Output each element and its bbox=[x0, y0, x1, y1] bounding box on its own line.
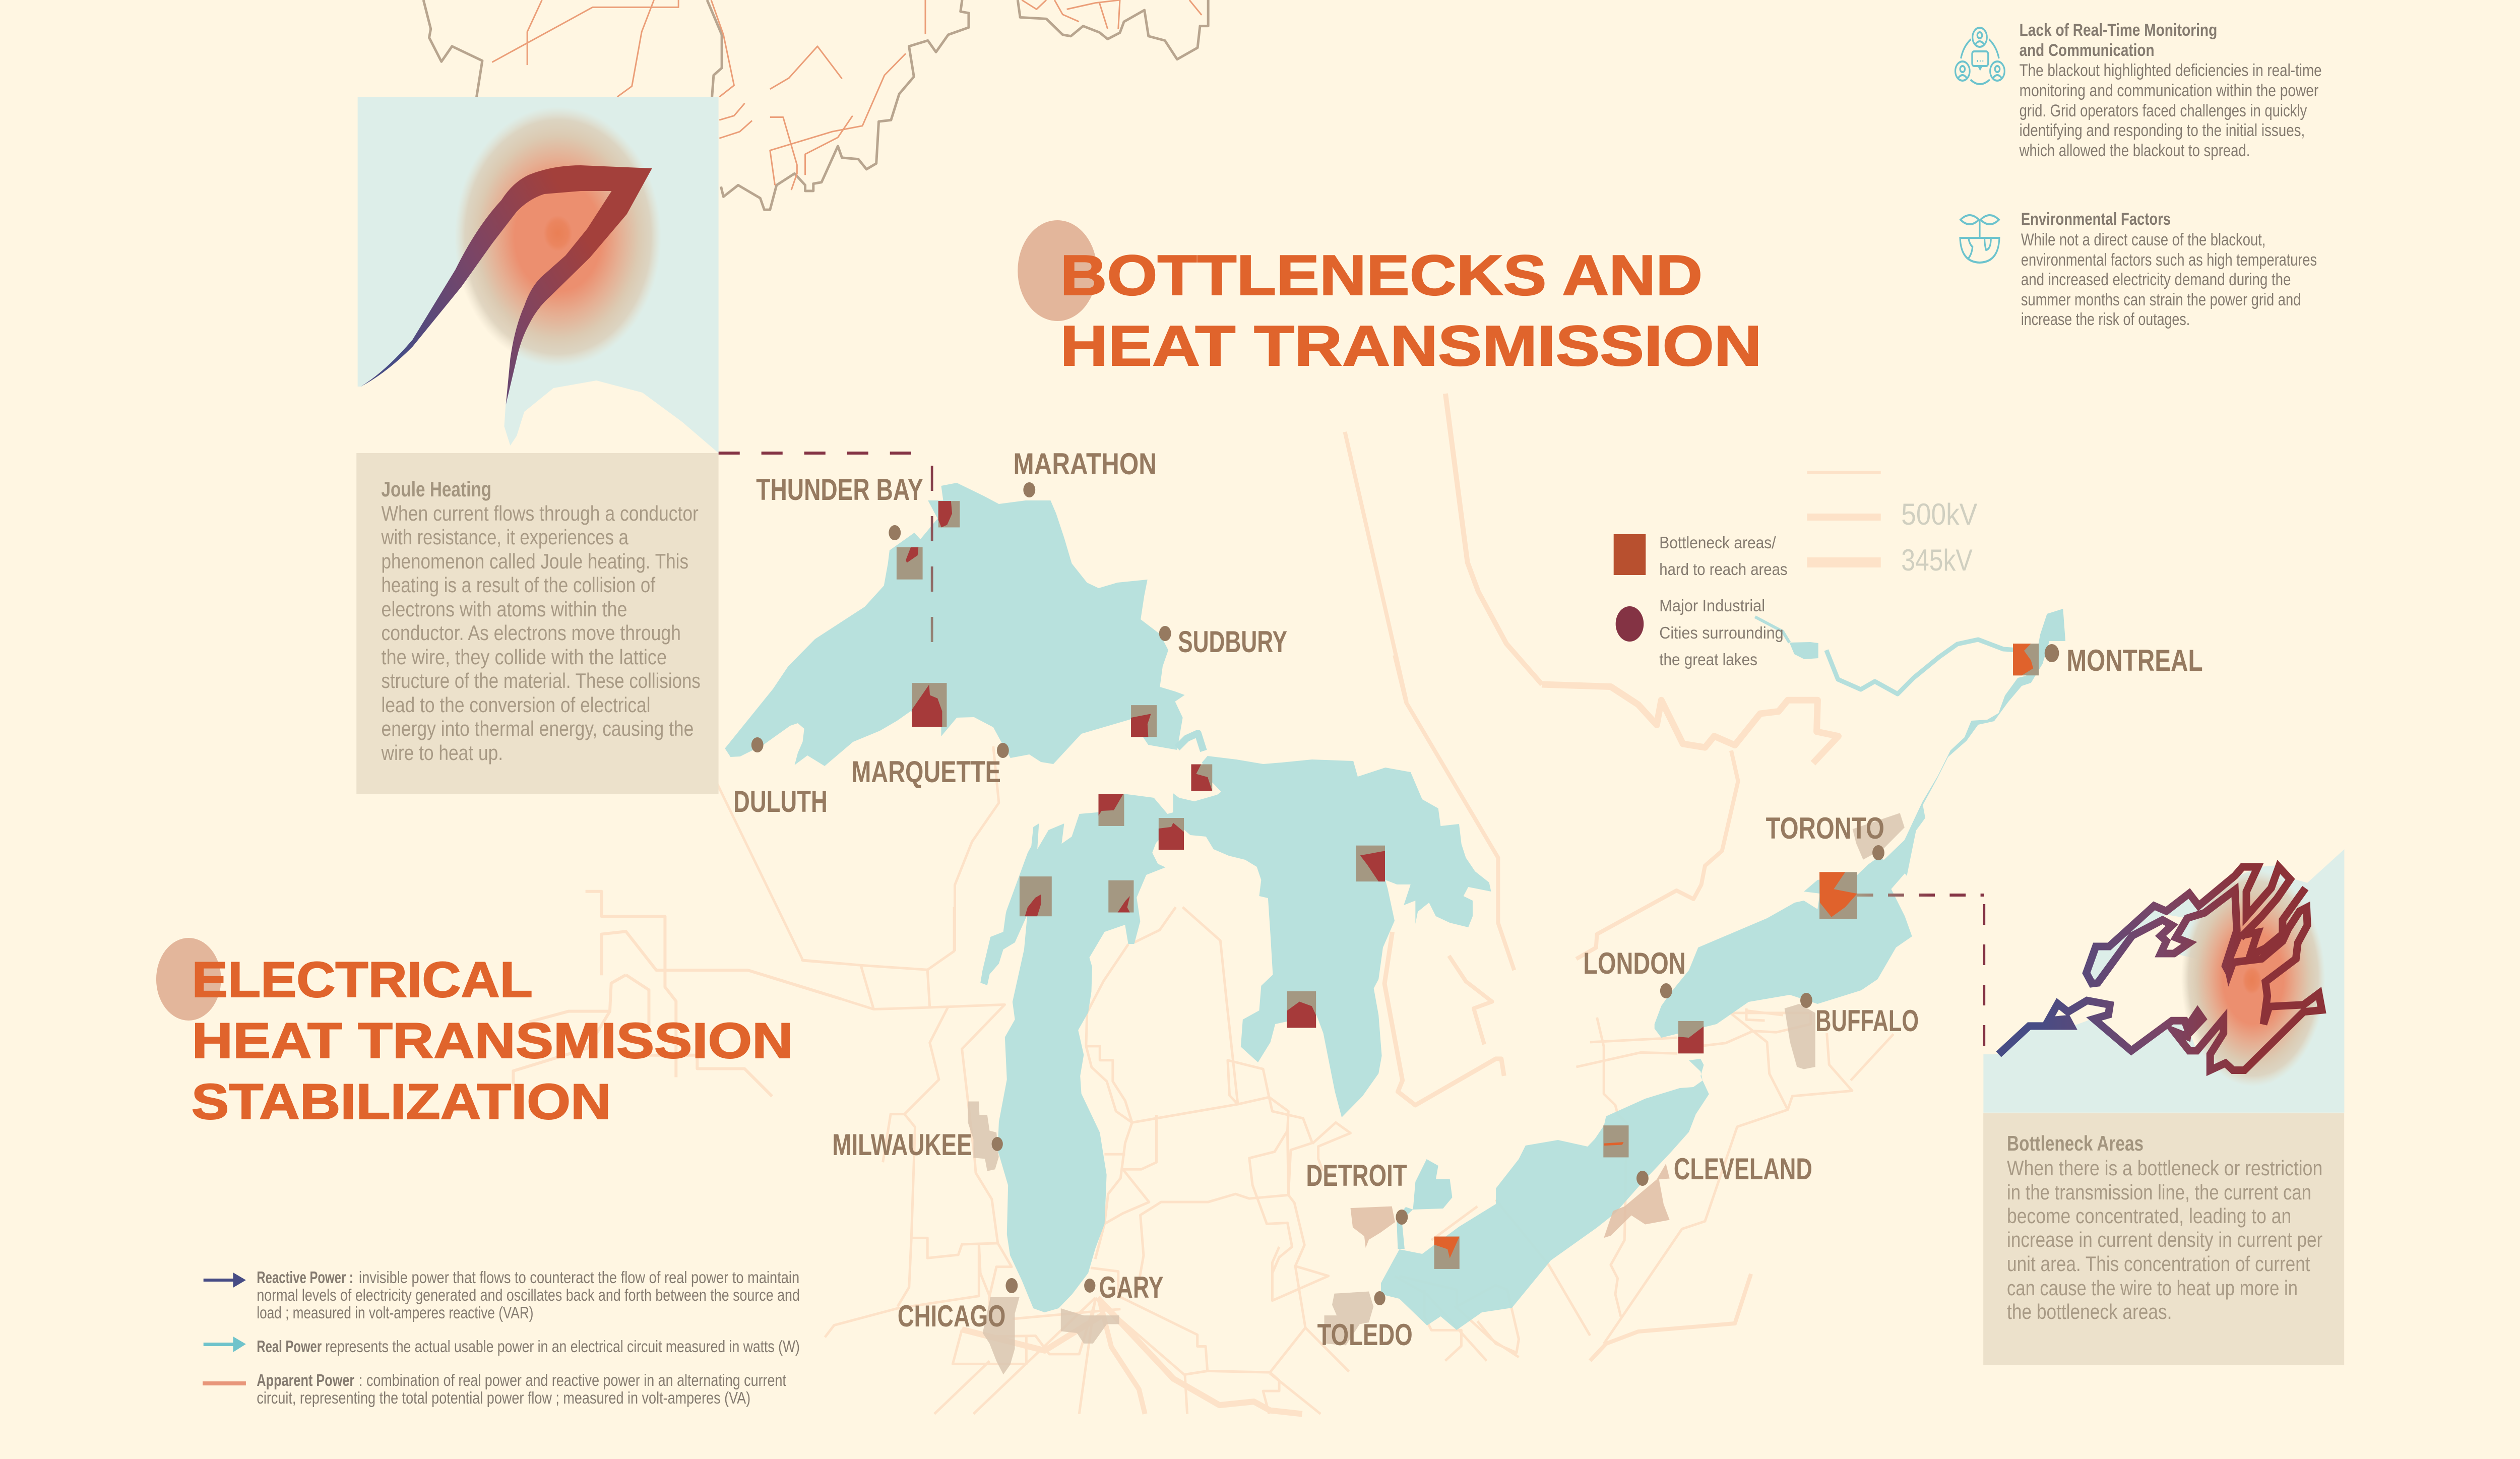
panel: joule heating text: Joule Heating bbox=[382, 478, 491, 501]
note: environmental factors: environmental factors such as high temperatures bbox=[2021, 250, 2317, 270]
note: lack of real-time monitoring: Lack of Real-Time Monitoring bbox=[2020, 20, 2217, 40]
title: bottlenecks and heat transmission bbox=[1060, 243, 1762, 377]
title: bottlenecks and heat transmission: BOTTLENECKS AND bbox=[1060, 243, 1703, 307]
northern coastline and thin lines bbox=[423, 0, 1208, 210]
city labels: THUNDER BAY bbox=[756, 473, 923, 506]
note: environmental factors: and increased electricity demand during the bbox=[2021, 270, 2291, 289]
panel: joule heating text: the wire, they collide with the lattice bbox=[382, 646, 667, 669]
lake: Ontario bbox=[1655, 805, 1925, 1038]
title: electrical heat transmission stabilization: STABILIZATION bbox=[192, 1073, 611, 1129]
legend: voltage lines: 345kV bbox=[1901, 544, 1973, 577]
panel: bottleneck areas text: Bottleneck Areas bbox=[2007, 1132, 2144, 1156]
panel: joule heating text: phenomenon called Joule heating. This bbox=[382, 550, 688, 574]
panel: bottleneck areas text: increase in current density in current per bbox=[2007, 1228, 2322, 1252]
note: environmental factors: While not a direct cause of the blackout, bbox=[2021, 230, 2265, 249]
legend: reactive power bbox=[204, 1268, 800, 1322]
title: bottlenecks and heat transmission: HEAT TRANSMISSION bbox=[1060, 314, 1762, 377]
panel: joule heating illustration bbox=[358, 97, 719, 453]
panel: joule heating text: with resistance, it experiences a bbox=[381, 526, 629, 549]
note: lack of real-time monitoring bbox=[2019, 20, 2322, 160]
panel: joule heating text: lead to the conversion of electrical bbox=[382, 693, 651, 717]
legend: major industrial cities: the great lakes bbox=[1659, 651, 1757, 669]
icon: environmental sprout and globe bbox=[1960, 215, 1999, 263]
city labels: CHICAGO bbox=[898, 1300, 1005, 1333]
city labels: GARY bbox=[1099, 1271, 1163, 1304]
panel: bottleneck areas text: unit area. This concentration of current bbox=[2007, 1252, 2310, 1276]
legend: reactive power: load ; measured in volt-amperes reactive (VAR) bbox=[257, 1304, 533, 1322]
legend: voltage lines: 500kV bbox=[1901, 498, 1977, 531]
city labels: MARATHON bbox=[1013, 448, 1157, 481]
legend: reactive power: normal levels of electricity generated and oscillates back and forth between the source and bbox=[257, 1286, 800, 1305]
title: electrical heat transmission stabilization bbox=[192, 951, 793, 1129]
city labels: CLEVELAND bbox=[1674, 1153, 1812, 1186]
panel: joule heating text: structure of the material. These collisions bbox=[382, 669, 701, 693]
city labels: MILWAUKEE bbox=[832, 1128, 972, 1162]
city labels: BUFFALO bbox=[1815, 1004, 1919, 1038]
panel: bottleneck areas text: When there is a bottleneck or restriction bbox=[2007, 1157, 2322, 1180]
legend: apparent power: Apparent Power bbox=[257, 1371, 355, 1390]
bottleneck squares: upper lakes bbox=[897, 501, 1212, 916]
lake: Erie bbox=[1381, 1059, 1709, 1330]
city labels: MARQUETTE bbox=[851, 755, 1001, 789]
legend: voltage lines bbox=[1807, 471, 1977, 577]
legend: bottleneck areas: Bottleneck areas/ bbox=[1659, 534, 1776, 552]
note: environmental factors: Environmental Factors bbox=[2021, 209, 2171, 229]
legend: bottleneck areas: hard to reach areas bbox=[1659, 560, 1788, 579]
legend: bottleneck areas bbox=[1614, 534, 1788, 579]
city labels: SUDBURY bbox=[1178, 625, 1287, 659]
legend: apparent power: circuit, representing the total potential power flow ; measured in volt-amperes (VA) bbox=[257, 1389, 750, 1408]
legend: major industrial cities: Major Industrial bbox=[1659, 597, 1765, 615]
panel: joule heating text: heating is a result of the collision of bbox=[382, 574, 655, 597]
city labels bbox=[733, 448, 2203, 1352]
panel: joule heating text: conductor. As electrons move through bbox=[382, 621, 681, 645]
wire: bottleneck conductor bbox=[1999, 867, 2322, 1070]
legend: reactive power: Reactive Power : bbox=[257, 1268, 353, 1287]
river: St Lawrence bbox=[1905, 609, 2065, 840]
city labels: MONTREAL bbox=[2066, 644, 2203, 677]
major city dots bbox=[751, 482, 2059, 1305]
city labels: LONDON bbox=[1583, 947, 1686, 980]
title marker: electrical bbox=[156, 938, 221, 1021]
city labels: DULUTH bbox=[733, 785, 828, 818]
panel: joule heating text: wire to heat up. bbox=[381, 741, 503, 765]
bottleneck squares: lower lakes bbox=[1287, 846, 1857, 1269]
note: environmental factors: increase the risk of outages. bbox=[2021, 309, 2190, 329]
transmission lines bbox=[513, 394, 1894, 1414]
panel: bottleneck areas text: can cause the wire to heat up more in bbox=[2007, 1277, 2298, 1300]
note: environmental factors: summer months can strain the power grid and bbox=[2021, 290, 2301, 309]
legend: major industrial cities bbox=[1616, 597, 1784, 669]
panel: joule heating text: energy into thermal energy, causing the bbox=[382, 717, 694, 741]
lake: St Clair bbox=[1397, 1159, 1452, 1249]
dashed connector: Joule heating bbox=[719, 453, 932, 665]
panel: bottleneck areas text: become concentrated, leading to an bbox=[2007, 1204, 2291, 1228]
legend: apparent power bbox=[203, 1371, 787, 1408]
legend: real power: Real Power bbox=[257, 1338, 322, 1356]
city labels: DETROIT bbox=[1306, 1159, 1407, 1192]
legend: major industrial cities: Cities surrounding bbox=[1659, 624, 1784, 643]
lake: Superior bbox=[725, 483, 1185, 766]
city labels: TORONTO bbox=[1766, 812, 1884, 845]
note: environmental factors bbox=[2021, 209, 2317, 329]
bottleneck square: Montreal bbox=[2013, 644, 2039, 675]
title marker: bottlenecks bbox=[1018, 220, 1097, 321]
dashed connector: bottleneck areas bbox=[1857, 895, 1984, 1061]
panel: bottleneck areas text: in the transmission line, the current can bbox=[2007, 1181, 2311, 1204]
panel: joule heating text: When current flows through a conductor bbox=[382, 502, 699, 526]
city labels: TOLEDO bbox=[1317, 1318, 1413, 1352]
river: Ottawa bbox=[1755, 617, 2019, 694]
title: electrical heat transmission stabilization: HEAT TRANSMISSION bbox=[192, 1012, 793, 1068]
legend: apparent power: : combination of real power and reactive power in an alternating current bbox=[359, 1371, 787, 1390]
note: lack of real-time monitoring: and Communication bbox=[2020, 40, 2154, 60]
note: lack of real-time monitoring: grid. Grid operators faced challenges in quickly bbox=[2020, 101, 2307, 120]
panel: bottleneck illustration bbox=[1983, 849, 2344, 1113]
panel: joule heating text bbox=[356, 453, 719, 794]
note: lack of real-time monitoring: The blackout highlighted deficiencies in real-time bbox=[2020, 60, 2322, 80]
title: electrical heat transmission stabilization: ELECTRICAL bbox=[192, 951, 533, 1007]
icon: people communicating bbox=[1956, 28, 2004, 84]
lake: Michigan and Huron bbox=[980, 756, 1491, 1312]
panel: bottleneck areas text bbox=[1983, 1113, 2344, 1365]
note: lack of real-time monitoring: identifying and responding to the initial issues, bbox=[2020, 120, 2305, 140]
wire: conductor bbox=[361, 165, 652, 405]
city footprints bbox=[968, 813, 1905, 1374]
river: St Marys bbox=[1177, 733, 1204, 751]
panel: joule heating text: electrons with atoms within the bbox=[382, 598, 627, 621]
legend: real power: represents the actual usable power in an electrical circuit measured in watts (W) bbox=[325, 1338, 800, 1356]
note: lack of real-time monitoring: monitoring and communication within the power bbox=[2020, 81, 2318, 100]
note: lack of real-time monitoring: which allowed the blackout to spread. bbox=[2019, 141, 2250, 160]
panel: bottleneck areas text: the bottleneck areas. bbox=[2007, 1300, 2172, 1324]
legend: reactive power: invisible power that flows to counteract the flow of real power to maintain bbox=[359, 1268, 799, 1287]
